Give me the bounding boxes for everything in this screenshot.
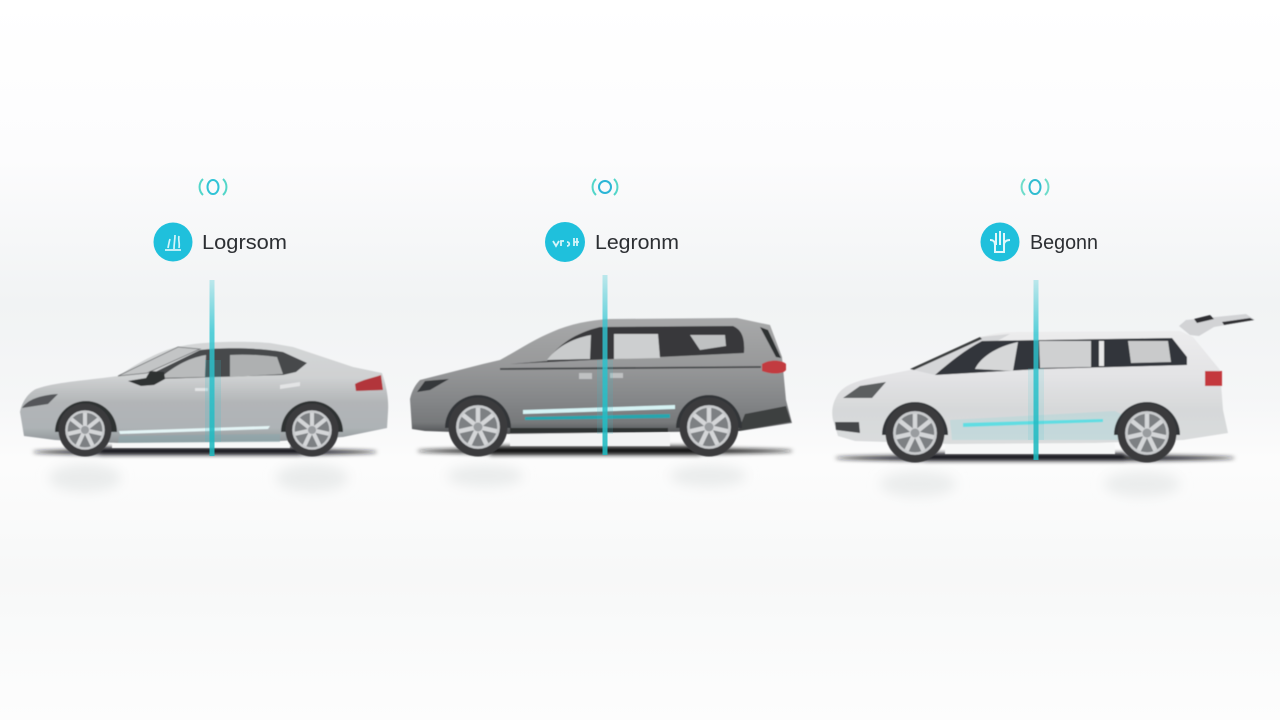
- label: Begonn: Begonn: [1030, 232, 1098, 254]
- car: van: [832, 314, 1255, 462]
- lower trim: [119, 426, 270, 434]
- ground shadow: [33, 447, 377, 455]
- windshield: [910, 334, 1010, 375]
- car: MPV: [410, 318, 792, 456]
- icon: top signal ring: [593, 179, 617, 195]
- panel: crossover MPV column: [410, 179, 793, 487]
- open tailgate: [1179, 314, 1255, 336]
- reflection: [49, 464, 348, 492]
- wheel: front: [886, 404, 944, 462]
- side windows: [935, 338, 1187, 375]
- tail light: [355, 375, 383, 391]
- beam: legroom line: [205, 280, 221, 456]
- beam: legroom line: [597, 275, 613, 455]
- door handles: [579, 373, 623, 379]
- wheel: front: [58, 403, 112, 457]
- beam: legroom line: [1028, 280, 1044, 460]
- wheel: front: [448, 398, 508, 456]
- reflection: [447, 465, 746, 487]
- icon: top signal ring: [1022, 179, 1048, 195]
- wheel: rear: [680, 398, 738, 456]
- wheel arches: [55, 401, 343, 432]
- icon: legroom badge: [980, 222, 1020, 262]
- wheel arches: [882, 402, 1180, 435]
- car: sedan: [20, 342, 388, 457]
- icon: legroom badge: [154, 222, 192, 262]
- windshield edge: [910, 337, 982, 370]
- door handles: [195, 382, 300, 391]
- reflection: [880, 471, 1180, 497]
- panel: white van column: [832, 179, 1255, 497]
- belt line: [500, 367, 761, 369]
- tail light: [1205, 371, 1222, 386]
- rear pillar window: [760, 327, 781, 358]
- windshield: [118, 347, 200, 376]
- tail light: [762, 361, 786, 374]
- headlight: [843, 382, 886, 398]
- icon: top signal ring: [200, 179, 226, 195]
- cyan side trim: [963, 419, 1103, 427]
- label: Logrsom: Logrsom: [202, 232, 287, 254]
- panel: sedan column: [20, 179, 388, 492]
- ground shadow: [417, 446, 793, 455]
- mirror: [128, 371, 165, 386]
- ground shadow: [835, 453, 1235, 461]
- front headlight: [22, 394, 58, 408]
- label: Legronm: Legronm: [595, 232, 679, 254]
- wheel: rear: [1118, 404, 1176, 462]
- cyan side trim: [523, 405, 675, 414]
- icon: legroom badge: [545, 222, 585, 262]
- side windows: [147, 348, 307, 379]
- side windows: [510, 326, 744, 364]
- wheel: rear: [285, 403, 339, 457]
- wheel arches: [445, 395, 742, 428]
- dark lower bumper: [738, 406, 791, 431]
- headlight: [417, 379, 449, 392]
- fog light: [835, 422, 860, 433]
